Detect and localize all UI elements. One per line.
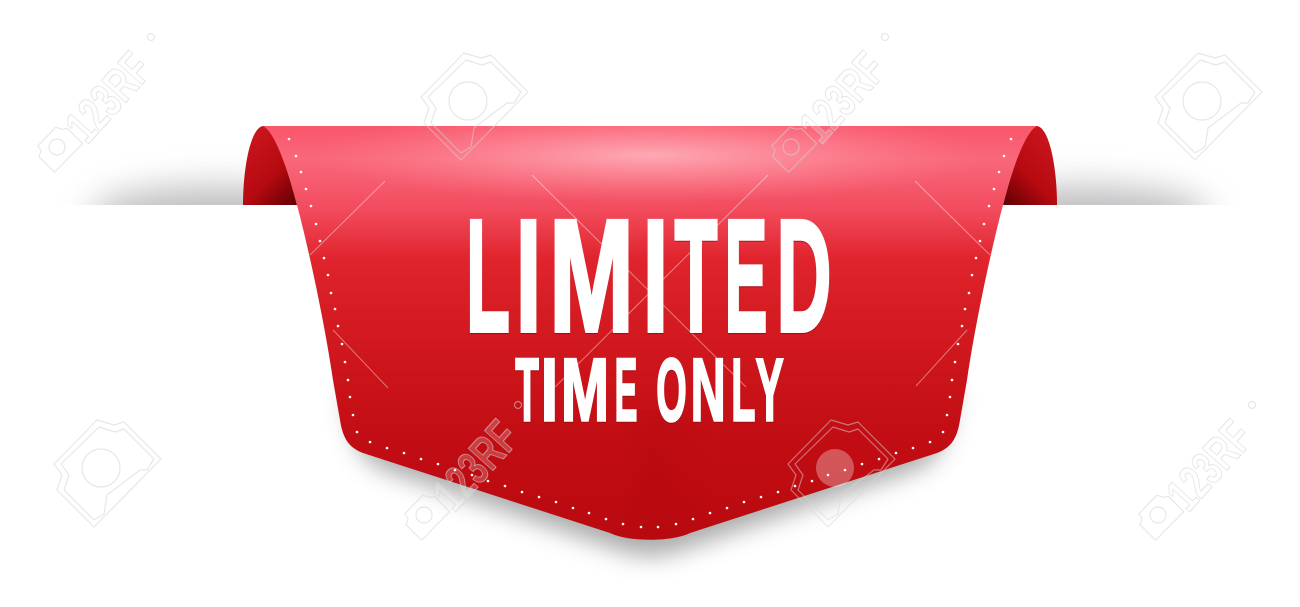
subheading: TIME ONLY: E [615,340,637,440]
heading: LIMITED: I [642,186,668,365]
infographic: red ribbon banner: D [776,186,832,365]
heading: LIMITED: L [466,186,510,365]
watermark logo bottom centre [405,402,529,540]
subheading: TIME ONLY: N [691,340,726,440]
stitching dots [288,138,1012,528]
ribbon drop shadow [345,390,955,556]
watermark icon top centre-left [421,53,528,160]
watermark icon bottom left [54,420,161,527]
watermark logo top left [38,34,162,172]
heading: LIMITED: T [674,186,718,365]
ribbon fold right [1003,126,1057,205]
watermark icon bottom centre-right [788,420,895,527]
subheading: TIME ONLY: M [561,340,609,440]
watermark logo top centre: 123RF [790,43,896,153]
watermark logo bottom right [1139,402,1263,540]
watermark logo top centre [772,34,896,172]
watermark icon top right [1155,53,1262,160]
watermark logo bottom centre: 123RF [423,411,529,521]
subheading: TIME ONLY: L [731,340,755,440]
heading: LIMITED: I [516,186,542,365]
wall shadow left [82,168,297,205]
ribbon fold left [243,126,297,205]
wall shadow right [1003,168,1218,205]
subheading: TIME ONLY: T [515,340,539,440]
watermark logo top left: 123RF [56,43,162,153]
subheading: TIME ONLY: I [541,340,558,440]
watermark logo bottom right: 123RF [1157,411,1263,521]
ribbon body [263,107,1037,545]
infographic: red ribbon banner: Y [756,340,784,440]
subheading: TIME ONLY: O [656,340,687,440]
heading: LIMITED: M [549,186,634,365]
heading: LIMITED: E [724,186,768,365]
diagonal crease lines [310,175,990,388]
